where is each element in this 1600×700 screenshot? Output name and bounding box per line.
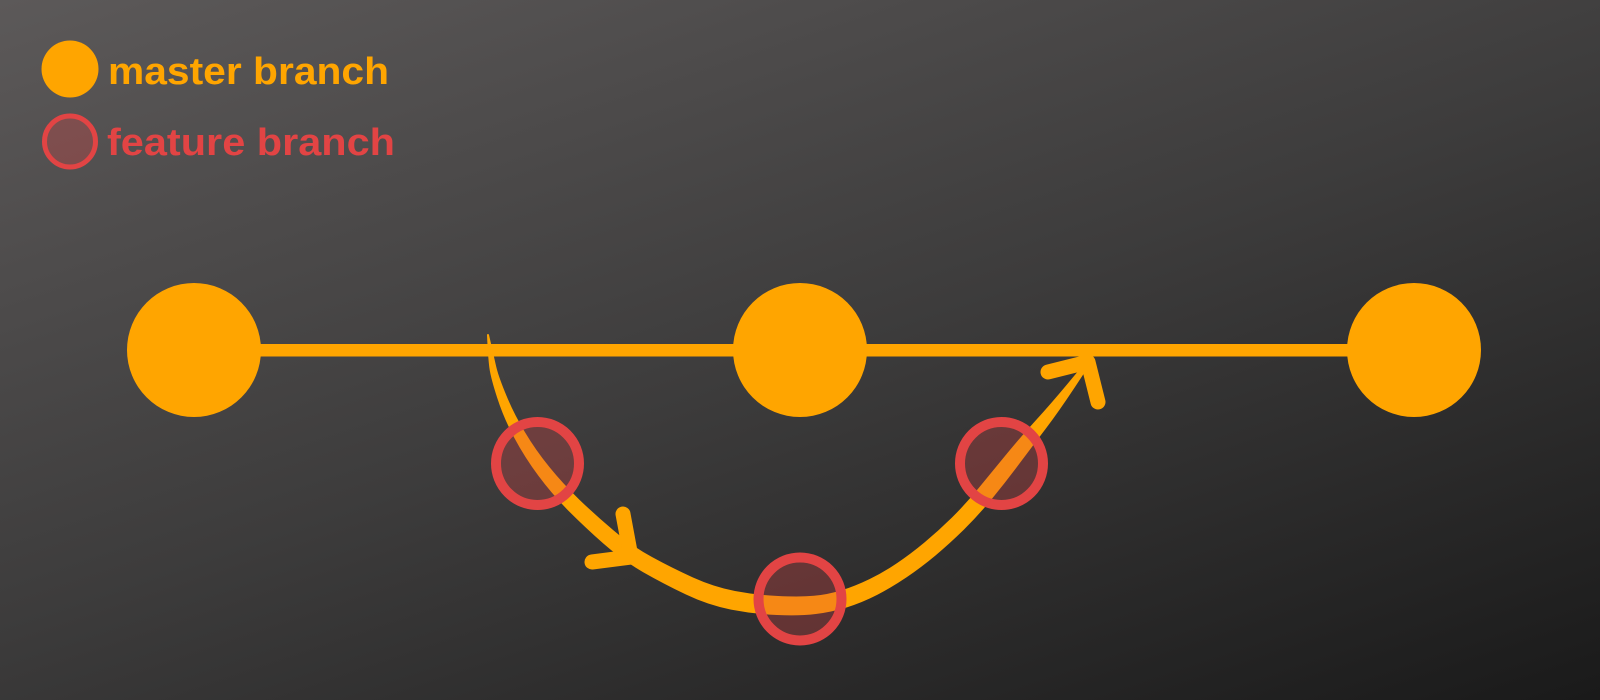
master commit 1 — [127, 283, 261, 417]
master commit 2 — [733, 283, 867, 417]
feature commit 1 — [496, 422, 579, 505]
feature commit 3 — [960, 422, 1043, 505]
legend icon: master branch — [42, 40, 98, 98]
arrowhead: outgoing — [592, 514, 631, 562]
master branch line — [194, 344, 1414, 356]
legend label: feature branch: feature branch — [107, 122, 395, 164]
feature commit 2 — [758, 558, 842, 640]
master commit 3 — [1347, 283, 1481, 417]
legend icon: feature branch — [44, 116, 96, 167]
legend — [42, 40, 395, 167]
arrowhead: merging back — [1048, 362, 1098, 402]
legend label: master branch: master branch — [108, 51, 389, 93]
feature branch curve — [488, 335, 1089, 614]
